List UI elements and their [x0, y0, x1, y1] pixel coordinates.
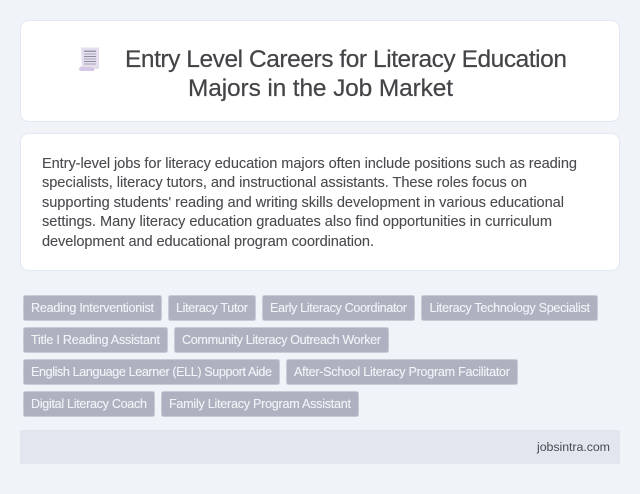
text block: description: specialists, literacy tutors, and instructional assistants. These roles focus on — [42, 175, 527, 191]
tag: Family Literacy Program Assistant — [162, 392, 358, 416]
tag: Early Literacy Coordinator — [262, 296, 414, 320]
tag: Literacy Tutor — [168, 296, 256, 320]
tag: Community Literacy Outreach Worker: Community Literacy Outreach Worker — [182, 333, 381, 347]
title: Entry Level Careers for Literacy Education — [125, 46, 567, 73]
tag: Digital Literacy Coach — [24, 392, 154, 416]
tag: Digital Literacy Coach: Digital Literacy Coach — [31, 397, 147, 411]
tag: English Language Learner (ELL) Support Aide — [24, 360, 280, 384]
text block: description: development and educational program coordination. — [42, 234, 374, 250]
text block: description — [42, 156, 577, 250]
text block: description: settings. Many literacy education graduates also find opportunities in curriculum — [42, 214, 552, 230]
footer: site name: jobsintra.com — [536, 440, 610, 454]
tag: After-School Literacy Program Facilitator: After-School Literacy Program Facilitator — [294, 365, 510, 379]
tag: After-School Literacy Program Facilitator — [286, 360, 518, 384]
tag: Community Literacy Outreach Worker — [174, 328, 388, 352]
tag: English Language Learner (ELL) Support Aide: English Language Learner (ELL) Support Aide — [31, 365, 272, 379]
title: Majors in the Job Market — [188, 75, 453, 102]
footer — [20, 430, 620, 464]
icon: document scroll — [79, 48, 99, 71]
tag: Reading Interventionist: Reading Interventionist — [31, 301, 154, 315]
text block: description: supporting students' reading and writing skills development in various educational — [42, 195, 564, 211]
tag: Early Literacy Coordinator: Early Literacy Coordinator — [270, 301, 407, 315]
tag: Title I Reading Assistant: Title I Reading Assistant — [31, 333, 160, 347]
tag: Family Literacy Program Assistant: Family Literacy Program Assistant — [169, 397, 352, 411]
text block: description: Entry-level jobs for literacy education majors often include positions such as reading — [42, 156, 577, 172]
panel: header — [20, 20, 620, 122]
tag: Title I Reading Assistant — [24, 328, 168, 352]
tag: Reading Interventionist — [24, 296, 162, 320]
tag: Literacy Technology Specialist — [422, 296, 598, 320]
tag list — [24, 296, 598, 416]
tag: Literacy Technology Specialist: Literacy Technology Specialist — [430, 301, 590, 315]
panel: description — [20, 134, 620, 270]
title — [125, 46, 567, 102]
tag: Literacy Tutor: Literacy Tutor — [176, 301, 248, 315]
